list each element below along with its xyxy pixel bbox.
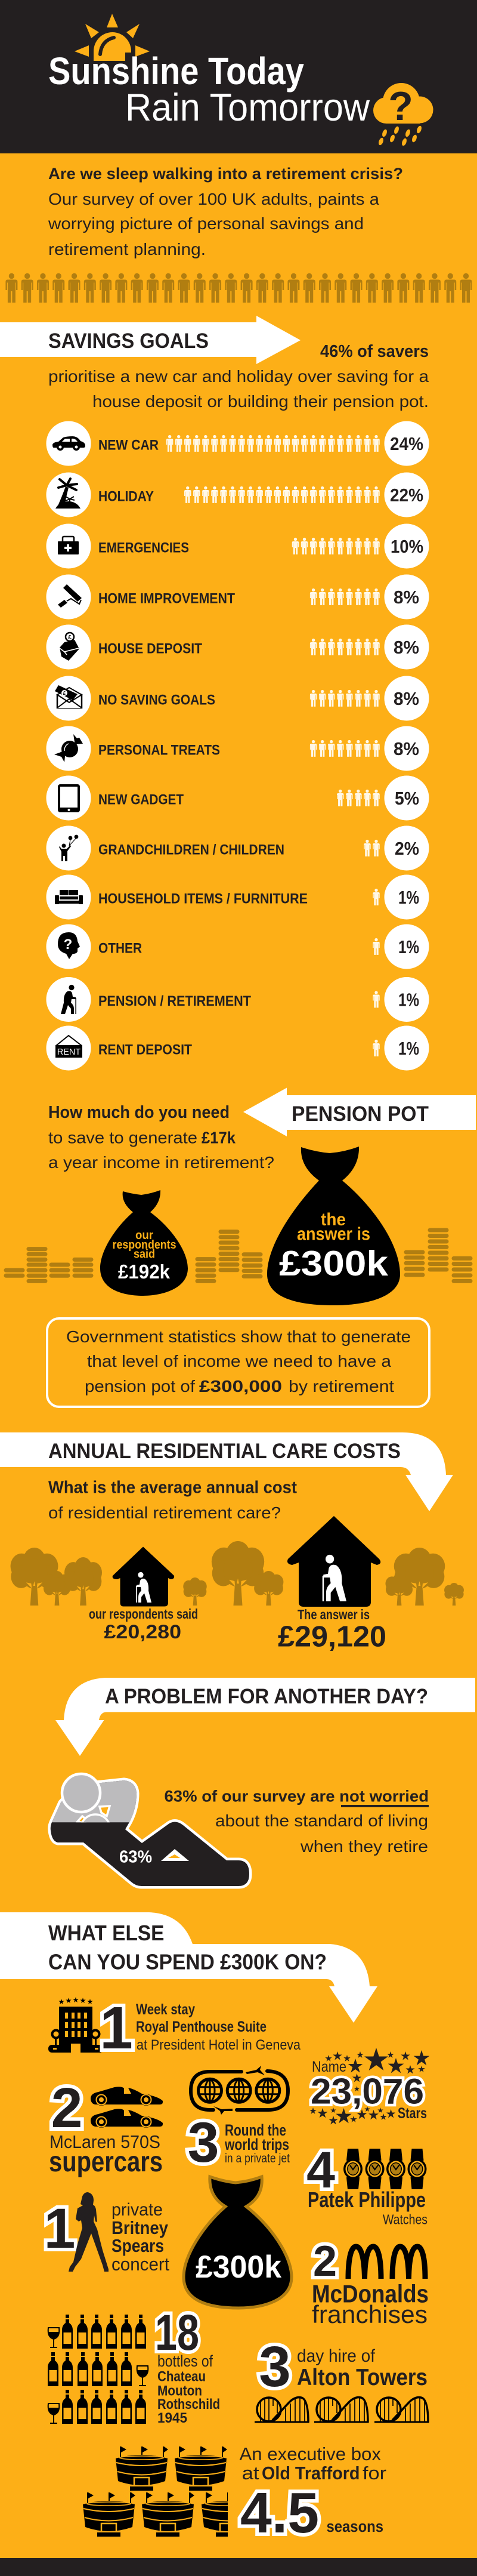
row: no saving goals: NO SAVING GOALS: [98, 692, 215, 708]
row: rent deposit: [47, 1025, 429, 1071]
item: alton towers: 3: [259, 2335, 291, 2399]
item: supercars: [49, 2076, 163, 2178]
item: world trips: world trips: [224, 2136, 289, 2153]
icon: house with coin: [60, 633, 79, 661]
heading: savings goals: SAVINGS GOALS: [48, 329, 209, 353]
money bag: respondents said: [100, 1190, 188, 1296]
icon: sofa: [55, 890, 83, 904]
row: pension: 1%: [398, 990, 419, 1010]
row: other: 1%: [398, 936, 419, 957]
item: mcdonalds: 2: [313, 2238, 337, 2285]
row: grandchildren: [47, 826, 429, 870]
icon: roller coasters: [255, 2398, 429, 2423]
item: hotel stay: at President Hotel in Geneva: [137, 2037, 301, 2053]
icon: head with question mark: [58, 932, 80, 959]
icon: head with question mark: ?: [64, 936, 72, 953]
money bag: the answer: the: [321, 1210, 346, 1230]
item: alton towers: Alton Towers: [297, 2365, 428, 2390]
icon: watches: [343, 2149, 427, 2189]
row: emergencies: 10%: [391, 536, 423, 557]
item: britney concert: Spears: [111, 2235, 164, 2256]
item: world trips: Round the: [225, 2121, 286, 2139]
savings summary text: [48, 342, 429, 411]
item: old trafford: seasons: [327, 2518, 383, 2535]
large care home: [287, 1516, 380, 1607]
callout: government statistics: that level of income we need to have a: [87, 1352, 391, 1370]
row: new gadget: NEW GADGET: [98, 791, 184, 808]
item: name stars: Name: [312, 2059, 346, 2075]
item: wine: 1945: [157, 2410, 187, 2426]
money bag: the answer: [267, 1147, 400, 1305]
item: wine: Mouton: [157, 2383, 202, 2399]
row: personal treats: 8%: [394, 738, 419, 759]
icon: wrapped sweet: [54, 734, 83, 762]
row: household items: 1%: [398, 887, 419, 908]
item: alton towers: day hire of: [297, 2346, 376, 2366]
callout: government statistics: £300,000: [199, 1377, 282, 1395]
answer figure: [278, 1607, 386, 1653]
item: hotel stay: [48, 1995, 301, 2062]
row: pension: PENSION / RETIREMENT: [98, 993, 251, 1009]
icon: rain cloud with question mark: ?: [388, 84, 413, 129]
row: rent deposit: 1%: [398, 1038, 419, 1059]
savings summary text: 46% of savers: [320, 342, 429, 361]
row: new car: [47, 421, 429, 466]
row: household items: HOUSEHOLD ITEMS / FURNITURE: [98, 890, 308, 907]
icon: singer silhouette: [69, 2192, 109, 2272]
item: old trafford: at: [242, 2463, 259, 2483]
money bag: respondents said: £192k: [118, 1261, 171, 1283]
item: old trafford: Old Trafford: [262, 2463, 360, 2483]
row: personal treats: PERSONAL TREATS: [98, 742, 220, 758]
respondents figure: our respondents said: [89, 1606, 198, 1622]
row: house deposit: 8%: [394, 637, 419, 658]
arrow: what else heading: [0, 1912, 377, 2023]
arrow: problem heading: [55, 1678, 475, 1756]
icon: tablet: [58, 784, 80, 812]
row: new gadget: [47, 776, 429, 820]
row: pension: [47, 977, 429, 1022]
icon: car: [52, 436, 85, 451]
item: old trafford: for: [363, 2463, 386, 2483]
row: no saving goals: [47, 676, 429, 721]
row: other: OTHER: [98, 941, 142, 956]
item: supercars: McLaren 570S: [49, 2131, 160, 2152]
row: house deposit: HOUSE DEPOSIT: [98, 641, 202, 657]
icon: sun: [75, 14, 150, 61]
item: old trafford: 4.5: [240, 2481, 319, 2545]
callout: government statistics: [47, 1318, 429, 1407]
respondents figure: £20,280: [104, 1621, 181, 1643]
callout: government statistics: pension pot of: [85, 1377, 195, 1395]
item: watches: [306, 2141, 428, 2227]
item: wine: 18: [155, 2304, 199, 2361]
item: old trafford: An executive box: [240, 2443, 381, 2464]
heading: what else: WHAT ELSE: [48, 1921, 165, 1945]
row: holiday: HOLIDAY: [98, 488, 154, 505]
item: hotel stay: Royal Penthouse Suite: [136, 2019, 267, 2035]
arrow: savings goals heading: [0, 316, 301, 364]
pension question text: a year income in retirement?: [48, 1153, 274, 1172]
panel: a problem for another day: [51, 1678, 475, 1886]
item: mcdonalds: franchises: [312, 2300, 428, 2328]
icon: bottles and glasses: [48, 2315, 148, 2424]
item: world trips: in a private jet: [225, 2152, 290, 2165]
heading: what else: CAN YOU SPEND £300K ON?: [48, 1950, 327, 1974]
row: rent deposit: RENT DEPOSIT: [98, 1042, 192, 1058]
item: watches: 4: [306, 2141, 335, 2199]
money bag: the answer: £300k: [279, 1244, 388, 1283]
money bag: respondents said: respondents: [112, 1238, 176, 1252]
money bag: £300k: £300k: [196, 2250, 282, 2285]
money bag: respondents said: our: [135, 1229, 153, 1242]
money bag: £300k: [184, 2177, 292, 2308]
item: watches: Watches: [383, 2212, 428, 2227]
pension question text: [48, 1103, 274, 1172]
pension question text: to save to generate: [48, 1128, 197, 1147]
money bag: the answer: answer is: [297, 1224, 370, 1244]
title line 1: Sunshine Today: [48, 50, 304, 93]
row: other: [47, 924, 429, 969]
pension question text: How much do you need: [48, 1103, 230, 1122]
item: mcdonalds: [312, 2238, 429, 2328]
icon: stadiums: [83, 2446, 228, 2537]
savings summary text: prioritise a new car and holiday over saving for a: [48, 367, 429, 386]
icon: globes and planes: [191, 2066, 288, 2115]
icon: paint roller: [58, 584, 82, 608]
row: no saving goals: 8%: [394, 688, 419, 709]
icon: envelope with banknote: £: [63, 691, 66, 696]
icon: arches: [348, 2247, 425, 2279]
care question text: of residential retirement care?: [48, 1503, 281, 1522]
reclining figure: 63%: [119, 1848, 152, 1867]
row: home improvement: HOME IMPROVEMENT: [98, 591, 235, 606]
icon: first aid kit: [58, 537, 79, 554]
panel: pension pot: [4, 1087, 476, 1407]
title line 2: Rain Tomorrow: [125, 85, 370, 129]
respondents figure: [89, 1606, 198, 1643]
reclining figure: [51, 1774, 249, 1886]
item: name stars: Stars: [398, 2105, 427, 2122]
savings summary text: house deposit or building their pension pot.: [92, 392, 429, 411]
row: house deposit: [47, 624, 429, 670]
care question text: [48, 1478, 297, 1522]
callout: government statistics: by retirement: [289, 1377, 394, 1395]
item: britney concert: concert: [111, 2254, 169, 2275]
icon: palm island: [55, 479, 80, 509]
row: new car: NEW CAR: [98, 437, 159, 454]
item: britney concert: Britney: [111, 2217, 169, 2238]
pension question text: £17k: [202, 1128, 236, 1147]
panel: what else can you spend on: [0, 1912, 429, 2545]
icon: hotel: [48, 1997, 103, 2053]
item: name stars: 23,076: [311, 2072, 424, 2112]
row: emergencies: [47, 524, 429, 568]
intro text: Are we sleep walking into a retirement crisis?: [48, 165, 403, 183]
item: world trips: [188, 2066, 290, 2174]
arrow: care costs heading: [0, 1432, 453, 1511]
icon: rent sign: [55, 1036, 82, 1058]
survey statement: [165, 1788, 429, 1856]
row: new gadget: 5%: [395, 788, 419, 809]
intro text: Our survey of over 100 UK adults, paints a: [48, 190, 379, 208]
icon: envelope with banknote: [55, 685, 82, 708]
intro text: retirement planning.: [48, 240, 206, 258]
row: home improvement: [47, 574, 429, 620]
panel: annual residential care costs: [0, 1432, 464, 1653]
row: household items: [47, 875, 429, 919]
item: britney concert: 1: [44, 2197, 75, 2260]
footer bar: [0, 2558, 477, 2576]
arrow: pension pot heading: [243, 1087, 476, 1136]
item: watches: Patek Philippe: [308, 2187, 426, 2212]
item: wine: bottles of: [157, 2352, 213, 2370]
heading: care costs: ANNUAL RESIDENTIAL CARE COSTS: [48, 1440, 401, 1463]
people row: [5, 273, 472, 303]
item: world trips: 3: [188, 2111, 219, 2174]
small care home: [113, 1547, 174, 1607]
row: home improvement: 8%: [394, 587, 419, 608]
item: hotel stay: Week stay: [136, 2001, 195, 2018]
item: wine: Chateau: [157, 2368, 206, 2385]
intro text: worrying picture of personal savings and: [48, 214, 364, 233]
item: hotel stay: 1: [100, 1995, 133, 2062]
survey statement: about the standard of living: [215, 1811, 428, 1830]
icon: rent sign: RENT: [57, 1047, 80, 1057]
row: emergencies: EMERGENCIES: [98, 540, 189, 556]
heading: problem: A PROBLEM FOR ANOTHER DAY?: [105, 1685, 428, 1708]
intro text: [48, 165, 403, 258]
row: personal treats: [47, 726, 429, 771]
icon: stars: [309, 2048, 429, 2124]
item: alton towers: [255, 2335, 429, 2423]
row: new car: 24%: [390, 433, 423, 454]
row: grandchildren: GRANDCHILDREN / CHILDREN: [98, 842, 284, 858]
money bag: respondents said: said: [134, 1248, 155, 1261]
panel: savings goals: [0, 316, 429, 1071]
care question text: What is the average annual cost: [48, 1478, 297, 1497]
icon: child with balloons: [59, 835, 78, 861]
trees: [11, 1541, 464, 1606]
row: grandchildren: 2%: [395, 838, 419, 859]
item: mcdonalds: McDonalds: [312, 2280, 429, 2308]
callout: government statistics: Government statistics show that to generate: [66, 1327, 411, 1346]
answer figure: The answer is: [298, 1607, 370, 1622]
item: name stars: [309, 2048, 429, 2124]
icon: elderly person: [61, 985, 76, 1014]
survey statement: when they retire: [300, 1837, 428, 1856]
header banner: [0, 0, 477, 153]
icon: rain cloud with question mark: [373, 83, 433, 146]
row: holiday: [47, 473, 429, 517]
item: britney concert: [44, 2192, 169, 2275]
heading: pension pot: PENSION POT: [292, 1102, 429, 1126]
item: supercars: 2: [51, 2076, 82, 2140]
row: holiday: 22%: [390, 485, 423, 506]
icon: house with coin: £: [68, 634, 72, 641]
item: old trafford: [83, 2446, 386, 2537]
heading: what else: [48, 1921, 327, 1974]
item: wine: Rothschild: [157, 2396, 220, 2412]
coin stacks: [4, 1228, 472, 1283]
item: britney concert: private: [111, 2200, 163, 2220]
icon: two cars: [91, 2087, 163, 2128]
answer figure: £29,120: [278, 1621, 386, 1653]
item: supercars: supercars: [49, 2146, 163, 2178]
survey statement: 63% of our survey are not worried: [165, 1788, 429, 1805]
item: wine: [48, 2304, 220, 2426]
